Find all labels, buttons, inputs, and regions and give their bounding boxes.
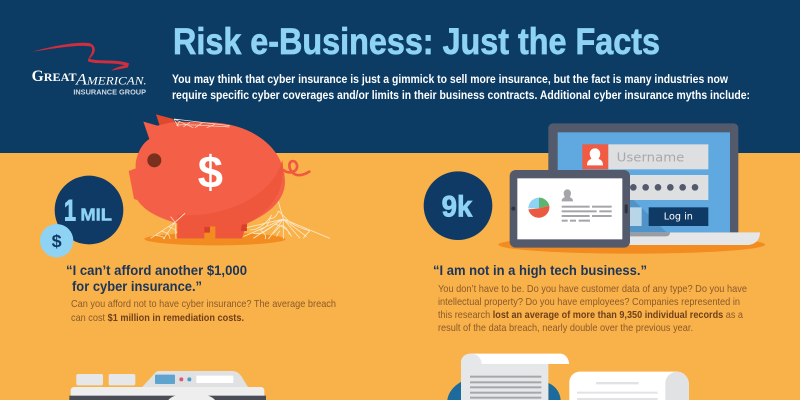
laptop base [623, 232, 760, 245]
title: Risk e-Business: Just the Facts [173, 20, 660, 62]
paper sheet [461, 354, 548, 400]
camera shoulder [71, 387, 264, 396]
camera illustration [69, 371, 266, 400]
pie slice green [539, 198, 549, 208]
documents illustration [447, 354, 689, 400]
camera right dial [109, 374, 135, 385]
pig body [129, 122, 285, 238]
logo wordmark italic: AMERICAN. [75, 72, 147, 89]
user icon [587, 148, 603, 165]
stat number 9k: 9k [442, 191, 473, 224]
camera body [69, 396, 266, 400]
navy badge circle [424, 171, 492, 240]
username label: Username [617, 151, 684, 165]
heading line 1: “I can’t afford another $1,000 [66, 262, 247, 278]
left myth body [71, 298, 336, 324]
camera lens ring [168, 393, 215, 400]
navy badge circle [55, 176, 123, 244]
cobweb left [151, 213, 185, 239]
stat badge: 9k [424, 171, 492, 240]
body line 3: this research lost an average of more than 9,350 individual records as a [438, 309, 743, 321]
paper text lines [470, 376, 541, 399]
body line 2: can cost $1 million in remediation costs. [71, 312, 244, 324]
intro line 2: require specific cyber coverages and/or limits in their business contracts. Additional cyber insurance myths include: [172, 90, 750, 102]
pig belly shade [177, 160, 283, 238]
stat unit MIL: MIL [80, 205, 112, 225]
pie slice blue [528, 198, 539, 208]
body line 2: intellectual property? Do you have employees? Companies represented in [438, 296, 740, 308]
heading line 2: for cyber insurance.” [72, 278, 202, 294]
tablet button [625, 204, 628, 213]
camera blue light [187, 377, 191, 381]
coin circle [40, 224, 73, 257]
user icon square [582, 144, 608, 169]
intro line 1: You may think that cyber insurance is just a gimmick to sell more insurance, but the fact is many industries now [172, 74, 728, 86]
camera left dial [76, 374, 103, 385]
username field [608, 144, 708, 169]
pig tail [283, 161, 309, 175]
body line 1: Can you afford not to have cyber insurance? The average breach [71, 298, 336, 310]
body line 4: result of the data breach, nearly double over the previous year. [438, 322, 693, 334]
blue folder right [548, 383, 561, 400]
piggy bank illustration [129, 114, 330, 245]
password dots [630, 184, 698, 191]
logo tagline: INSURANCE GROUP [73, 87, 146, 96]
logo wordmark: GREAT [32, 68, 77, 85]
cobweb right [243, 202, 330, 239]
left myth heading [66, 262, 247, 294]
coin dollar sign: $ [52, 231, 62, 251]
logo eagle swoosh [32, 43, 129, 71]
pig notch accent [204, 227, 210, 233]
camera display [196, 376, 233, 383]
login button [649, 207, 708, 226]
laptop notch [623, 232, 670, 236]
pig rear leg accent [241, 224, 247, 231]
right myth heading: “I am not in a high tech business.” [433, 262, 647, 278]
pig shadow [144, 233, 286, 245]
right myth body [438, 283, 747, 334]
pig dollar sign: $ [198, 147, 223, 198]
login label: Log in [664, 212, 693, 223]
scroll curl [470, 354, 569, 364]
tablet camera [511, 207, 515, 211]
tablet screen [517, 178, 622, 239]
camera top plate [142, 371, 248, 388]
second scroll text lines [577, 392, 658, 400]
intro text [172, 74, 750, 102]
device shadow [498, 236, 765, 254]
pig legs notch [204, 227, 215, 239]
second scroll [569, 372, 689, 400]
stat badge: 1 MIL [40, 176, 123, 257]
camera viewfinder [155, 375, 175, 384]
body line 1: You don’t have to be. Do you have customer data of any type? Do you have [438, 283, 747, 295]
second scroll heading line [596, 382, 639, 384]
blue folder left [447, 382, 462, 400]
stat number 1: 1 [64, 195, 76, 228]
screen diagonal shade [623, 190, 667, 232]
remember checkbox [623, 207, 642, 226]
camera red light [179, 377, 183, 381]
laptop screen [558, 132, 730, 232]
laptop and tablet illustration [498, 123, 765, 254]
tablet text lines [562, 206, 612, 222]
pie chart [528, 198, 549, 218]
pie slice red [528, 206, 549, 218]
logo: Great American Insurance Group [32, 43, 147, 96]
pig far ear [156, 114, 177, 128]
pig eye [147, 153, 161, 167]
laptop lid [548, 123, 738, 237]
tablet person icon [562, 189, 573, 201]
header band [0, 0, 800, 153]
second scroll curl [665, 372, 689, 400]
tablet body [510, 170, 630, 248]
password field [582, 175, 708, 200]
cobweb on back [174, 119, 230, 128]
